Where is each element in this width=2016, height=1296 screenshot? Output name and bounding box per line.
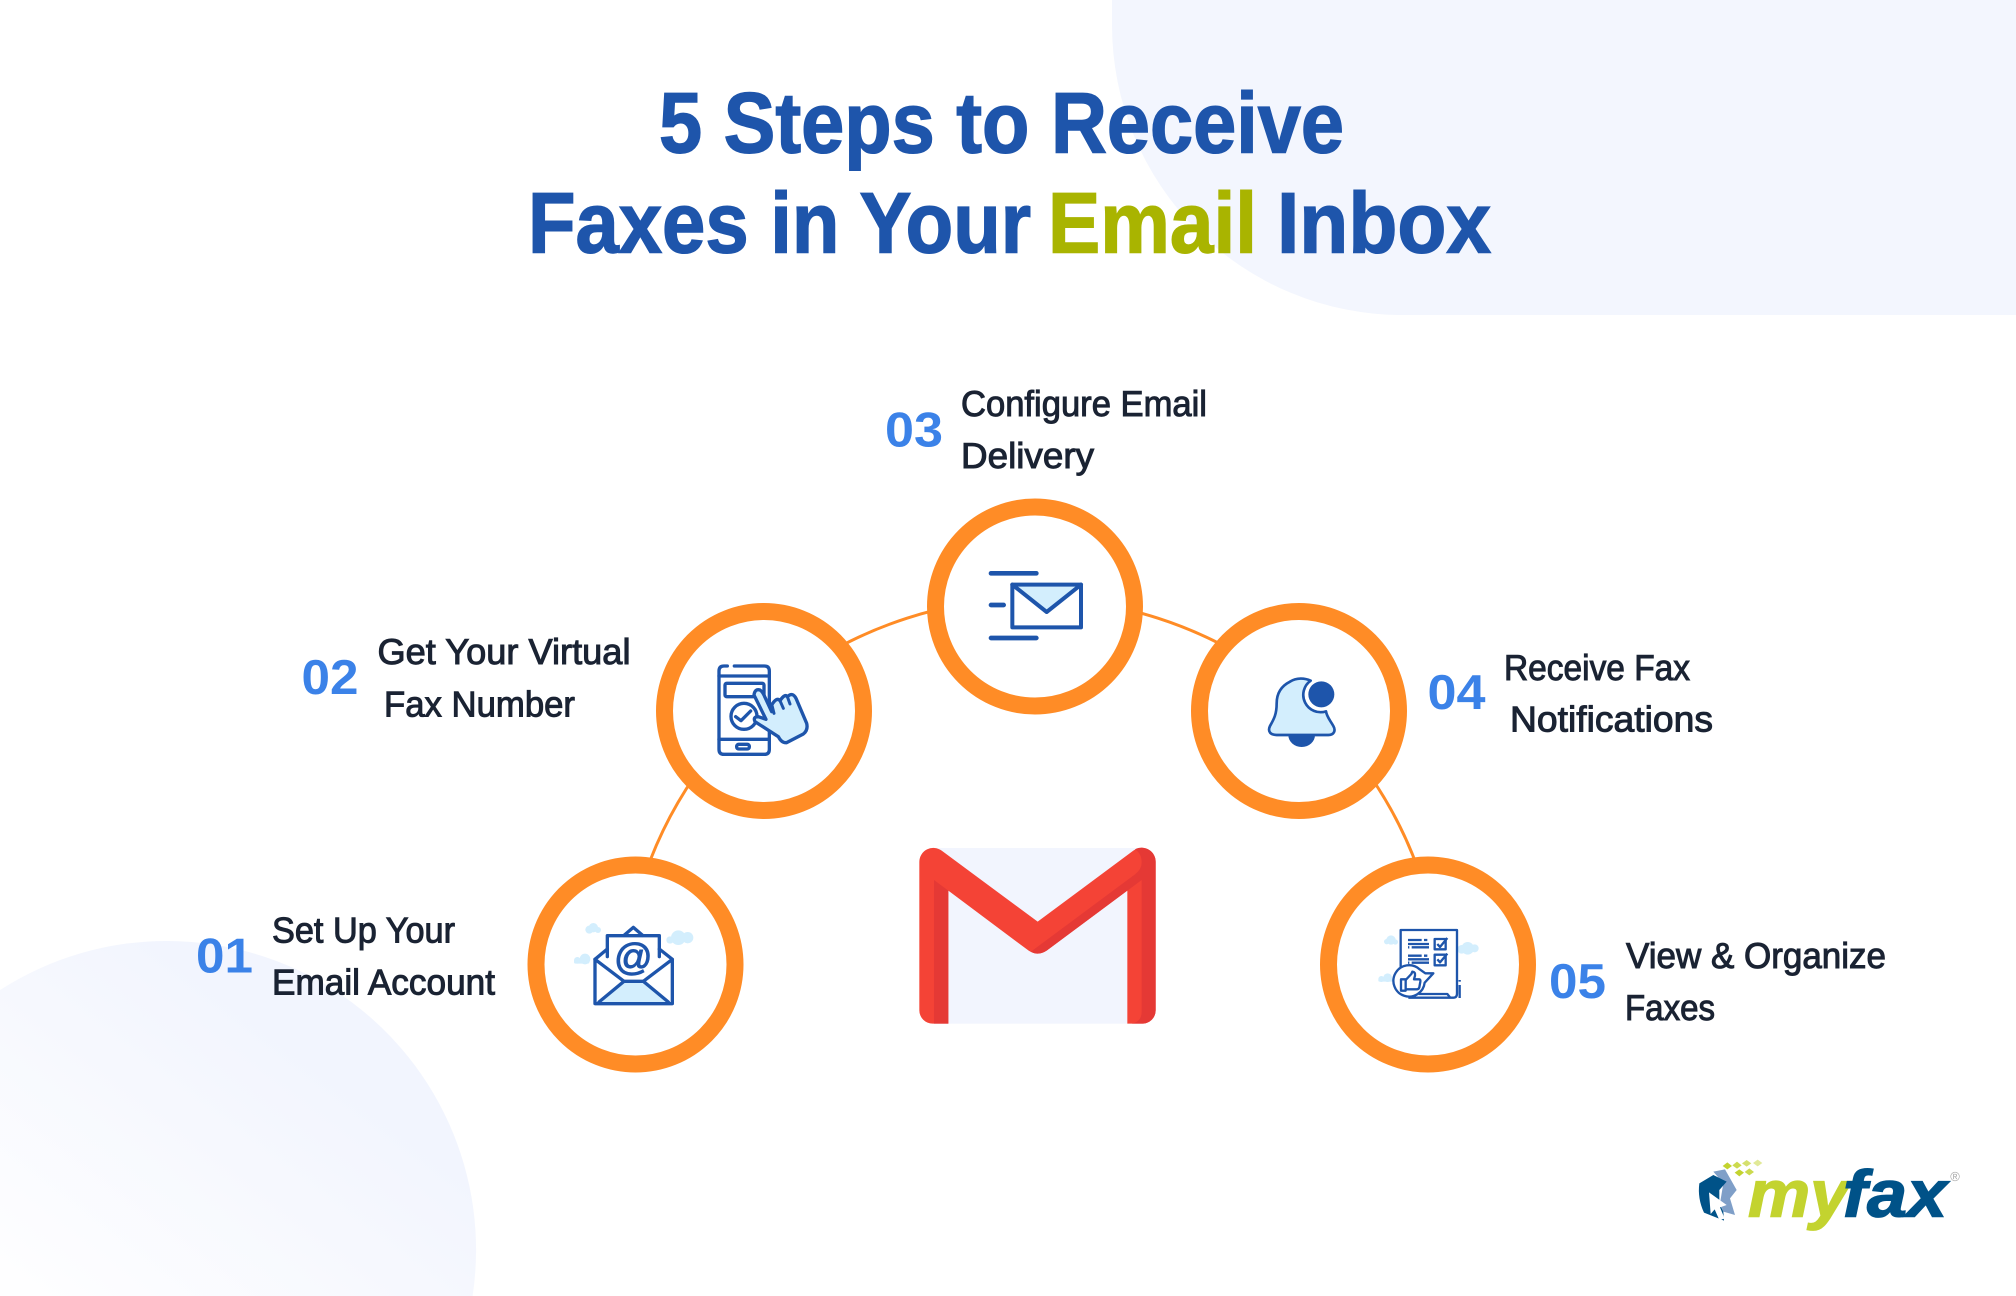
step 1 circle: [536, 865, 735, 1064]
step 5 circle: [1328, 865, 1528, 1064]
step 5 label: View & Organize: [1626, 935, 1886, 976]
myfax logo: [1699, 1156, 1960, 1230]
title: 5 Steps to Receive: [659, 76, 1344, 172]
title: Faxes in Your: [528, 176, 1031, 272]
step 4 label: [1428, 647, 1713, 740]
step 2 label: [302, 631, 630, 724]
step 2 label: Get Your Virtual: [378, 631, 630, 672]
step 2 label: 02: [302, 651, 358, 705]
icon: checklist with thumbs up: [1378, 930, 1479, 998]
step 3 label: Delivery: [961, 435, 1094, 476]
icon: open envelope with at sign: @: [614, 936, 653, 978]
step 4 label: Receive Fax: [1504, 647, 1690, 688]
myfax logo: fax: [1843, 1156, 1950, 1230]
step 4 label: Notifications: [1510, 698, 1713, 740]
step 4 label: 04: [1428, 666, 1486, 720]
myfax logo: my: [1748, 1156, 1852, 1230]
step 1 label: Email Account: [272, 962, 495, 1002]
step 1 label: 01: [196, 930, 253, 984]
step 3 label: Configure Email: [961, 383, 1207, 424]
step 1 label: Set Up Your: [272, 910, 455, 950]
icon: phone with pointing hand: [719, 666, 807, 754]
step 1 label: [196, 910, 495, 1002]
step 5 label: Faxes: [1625, 987, 1715, 1028]
myfax logo: ®: [1950, 1169, 1960, 1184]
step 2 label: Fax Number: [384, 684, 575, 724]
step 2 circle: [664, 612, 864, 810]
icon: notification bell: [1269, 679, 1334, 747]
title: Inbox: [1277, 176, 1491, 272]
title: [528, 76, 1491, 272]
gmail logo: [919, 848, 1156, 1024]
title: Email: [1048, 176, 1257, 272]
step 3 label: [885, 383, 1207, 476]
step 5 label: [1549, 935, 1886, 1028]
icon: sending envelope: [991, 573, 1081, 638]
icon: open envelope with at sign: [574, 923, 693, 1004]
background shape: top right panel: [1112, 0, 2016, 315]
step 5 label: 05: [1549, 955, 1606, 1009]
step 4 circle: [1200, 612, 1398, 810]
step 3 label: 03: [885, 404, 943, 458]
background shape: bottom left circle: [0, 941, 476, 1296]
connector arc linking the five steps: [640, 599, 1425, 890]
step 3 circle: [936, 507, 1134, 706]
